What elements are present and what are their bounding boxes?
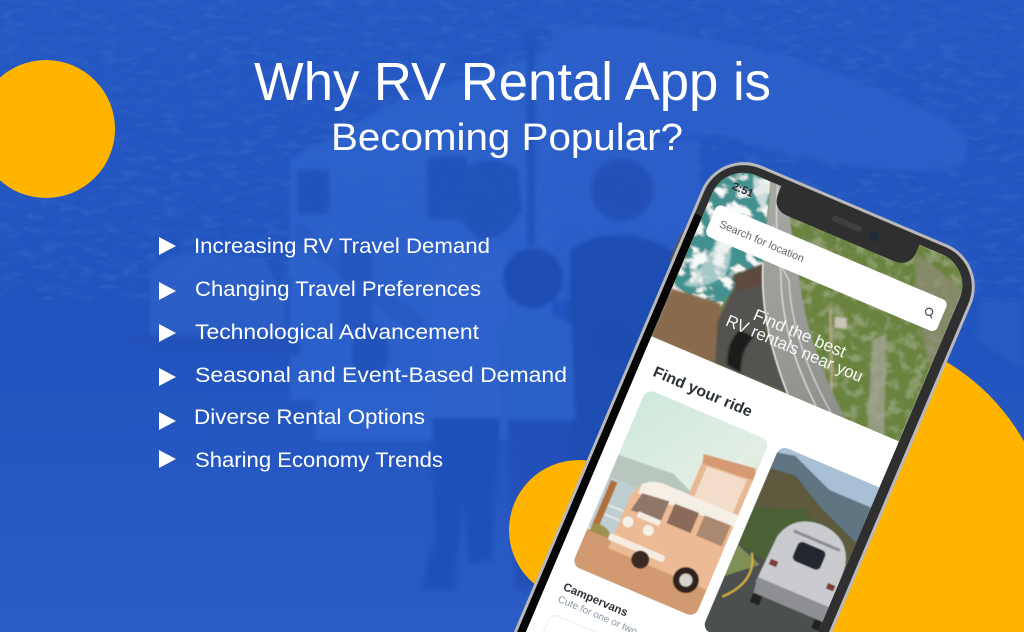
child bbox=[503, 248, 563, 308]
item: Diverse Rental Options: Diverse Rental Options bbox=[194, 406, 425, 429]
camera bbox=[867, 229, 881, 244]
shadow patch near ground bbox=[210, 400, 315, 450]
title: Why RV Rental App is bbox=[254, 52, 771, 112]
card label: Campervans: Campervans bbox=[561, 581, 629, 619]
airstream trailer bbox=[750, 520, 847, 631]
item: Sharing Economy Trends: Sharing Economy Trends bbox=[195, 449, 443, 472]
bullet list of reasons bbox=[159, 235, 567, 472]
ground at right bbox=[975, 300, 1024, 370]
RV body bbox=[290, 50, 552, 440]
phone body bbox=[446, 148, 989, 632]
RV dark pole bbox=[527, 35, 535, 245]
card: campervan photo bbox=[572, 389, 770, 618]
road through the hero photo bbox=[761, 182, 846, 418]
section heading: Find your ride bbox=[650, 364, 755, 421]
speaker bbox=[831, 215, 863, 233]
phone notch bbox=[772, 183, 921, 268]
phone side button bbox=[669, 232, 685, 263]
decorative yellow circle: top left bbox=[0, 60, 115, 198]
item: Changing Travel Preferences: Changing Travel Preferences bbox=[195, 278, 481, 301]
parked car bbox=[150, 253, 285, 340]
item: Increasing RV Travel Demand: Increasing RV Travel Demand bbox=[194, 235, 490, 258]
man bbox=[591, 159, 653, 221]
RV windows bbox=[297, 170, 329, 214]
status bar time: 2:51 bbox=[730, 180, 755, 200]
title: Becoming Popular? bbox=[331, 117, 683, 159]
RV cab-over roof bbox=[552, 26, 968, 171]
search bar bbox=[704, 204, 949, 333]
item: Technological Advancement: Technological Advancement bbox=[195, 321, 479, 344]
hero headline: RV rentals near you bbox=[723, 311, 866, 386]
phone screen bbox=[526, 172, 962, 632]
search bar: Search for location bbox=[717, 218, 806, 265]
hero headline: Find the best bbox=[750, 305, 849, 362]
card: airstream trailer photo bbox=[702, 445, 891, 632]
campervan illustration bbox=[607, 454, 756, 594]
decorative yellow circle: behind phone lower left bbox=[509, 460, 649, 600]
hero aerial photo of coastal road bbox=[651, 162, 973, 442]
next card outline bbox=[543, 615, 596, 632]
phone mockup bbox=[514, 162, 975, 632]
white content panel bbox=[526, 336, 899, 632]
decorative yellow circle: bottom right bbox=[618, 331, 1024, 632]
item: Seasonal and Event-Based Demand: Seasonal and Event-Based Demand bbox=[195, 364, 567, 387]
title bbox=[254, 52, 771, 159]
icon: magnifier bbox=[924, 308, 934, 319]
woman bbox=[458, 160, 522, 240]
